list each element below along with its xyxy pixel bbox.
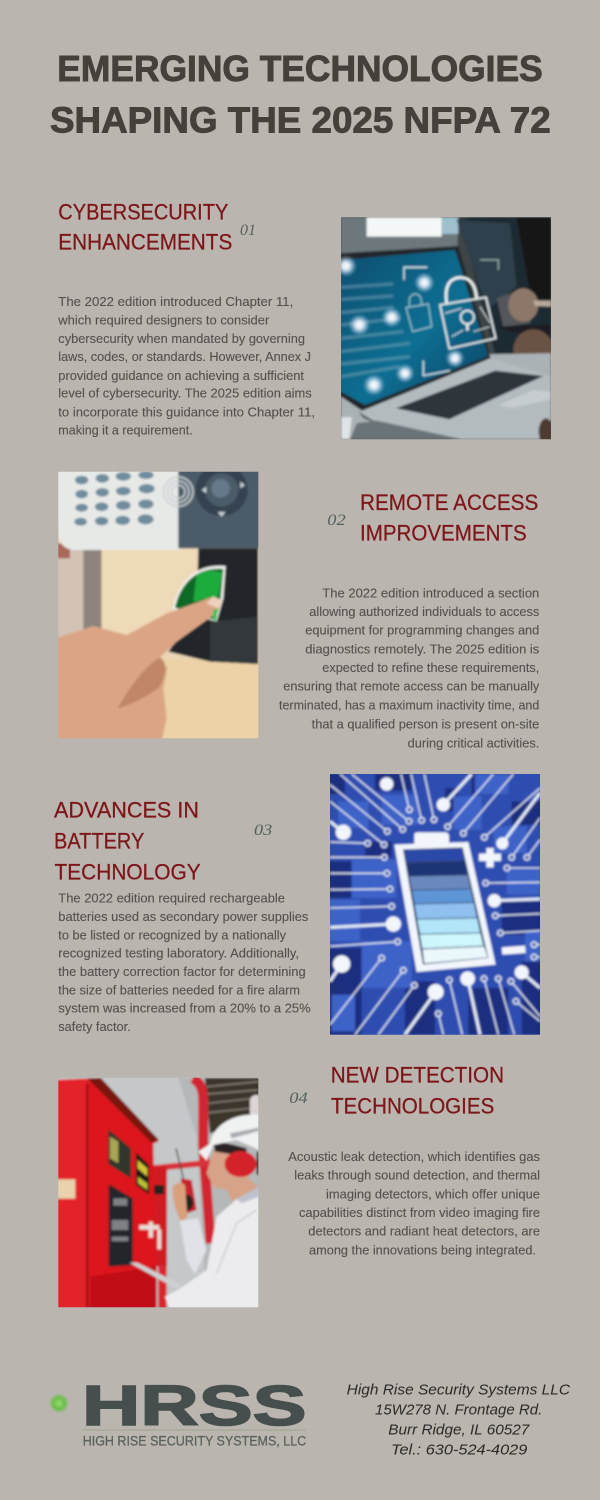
section number 04: 04	[289, 1090, 308, 1107]
text block: battery: to be listed or recognized by a nationally	[58, 928, 287, 942]
text block: cybersecurity: The 2022 edition introduced Chapter 11,	[58, 295, 293, 309]
text block: remote access: allowing authorized individuals to access	[309, 605, 539, 619]
text block: detection: Acoustic leak detection, which identifies gas	[288, 1150, 540, 1164]
text block: remote access: equipment for programming changes and	[305, 624, 539, 638]
section number 02: 02	[327, 512, 346, 529]
text block: cybersecurity: laws, codes, or standards. However, Annex J	[58, 350, 311, 364]
title: SHAPING THE 2025 NFPA 72	[50, 100, 551, 141]
heading: new detection technologies: TECHNOLOGIES	[331, 1094, 494, 1119]
heading: cybersecurity enhancements: ENHANCEMENTS	[58, 229, 232, 254]
text block: detection: capabilities distinct from video imaging fire	[299, 1206, 540, 1220]
text block: detection: leaks through sound detection, and thermal	[294, 1169, 540, 1183]
text block: detection: among the innovations being integrated.	[309, 1243, 536, 1257]
text block: detection: imaging detectors, which offer unique	[326, 1187, 540, 1201]
text block: remote access: The 2022 edition introduced a section	[322, 586, 539, 600]
title	[50, 48, 551, 141]
text block: detection: detectors and radiant heat detectors, are	[308, 1225, 540, 1239]
panel: cybersecurity enhancements	[57, 199, 563, 445]
text block: battery: recognized testing laboratory. Additionally,	[58, 947, 299, 961]
heading: cybersecurity enhancements: CYBERSECURITY	[58, 199, 228, 224]
text block: cybersecurity: cybersecurity when mandated by governing	[58, 332, 305, 346]
text block: battery: the size of batteries needed for a fire alarm	[58, 983, 300, 997]
text block: cybersecurity: making it a requirement.	[58, 423, 193, 437]
icon: green dot	[50, 1395, 68, 1412]
heading: remote access improvements	[360, 490, 538, 546]
text block: battery: the battery correction factor for determining	[58, 965, 306, 979]
section number 01: 01	[240, 222, 256, 239]
text block: battery: system was increased from a 20% to a 25%	[58, 1002, 311, 1016]
text block: remote access: terminated, has a maximum inactivity time, and	[279, 698, 539, 712]
text block: remote access: ensuring that remote access can be manually	[283, 680, 540, 694]
panel: advances in battery technology	[54, 768, 558, 1041]
text block: cybersecurity	[57, 295, 315, 437]
logo tagline: HIGH RISE SECURITY SYSTEMS, LLC	[83, 1433, 306, 1449]
text block: remote access: during critical activities.	[408, 736, 539, 750]
text block: remote access: diagnostics remotely. The 2025 edition is	[305, 642, 539, 656]
heading: cybersecurity enhancements	[58, 199, 232, 254]
contact information: 15W278 N. Frontage Rd.	[375, 1401, 542, 1418]
photo: battery on circuit board	[330, 774, 540, 1035]
heading: advances in battery technology: TECHNOLOGY	[54, 859, 201, 884]
text block: remote access: expected to refine these requirements,	[322, 661, 539, 675]
contact information: Tel.: 630-524-4029	[391, 1441, 528, 1458]
section number 03: 03	[254, 822, 272, 839]
heading: advances in battery technology: ADVANCES IN	[54, 797, 199, 822]
heading: remote access improvements: REMOTE ACCESS	[360, 490, 538, 515]
photo: laptop with padlock	[341, 217, 551, 440]
text block: battery	[58, 892, 311, 1034]
text block: cybersecurity: to incorporate this guidance into Chapter 11,	[58, 406, 315, 420]
heading: advances in battery technology: BATTERY	[54, 828, 144, 853]
heading: advances in battery technology	[54, 797, 201, 884]
text block: detection	[288, 1150, 540, 1257]
heading: new detection technologies: NEW DETECTION	[331, 1062, 504, 1087]
text block: cybersecurity: level of cybersecurity. The 2025 edition aims	[58, 387, 312, 401]
panel: remote access improvements	[50, 464, 540, 750]
heading: new detection technologies	[331, 1062, 504, 1119]
text block: battery: batteries used as secondary power supplies	[58, 910, 308, 924]
heading: remote access improvements: IMPROVEMENTS	[360, 521, 527, 546]
photo: fingerprint reader	[58, 472, 258, 738]
text block: cybersecurity: which required designers to consider	[57, 313, 269, 327]
text block: remote access: that a qualified person is present on-site	[312, 717, 539, 731]
logo wordmark: HRSS	[82, 1374, 306, 1438]
panel: new detection technologies	[50, 1062, 540, 1320]
contact information: High Rise Security Systems LLC	[347, 1381, 570, 1398]
title: EMERGING TECHNOLOGIES	[57, 48, 543, 89]
contact information	[347, 1381, 570, 1458]
contact information: Burr Ridge, IL 60527	[388, 1421, 530, 1438]
text block: battery: The 2022 edition required rechargeable	[58, 892, 285, 906]
logo: HRSS	[50, 1374, 306, 1449]
text block: battery: safety factor.	[58, 1020, 131, 1034]
photo: technician at red fire pump controller	[58, 1078, 258, 1308]
text block: remote access	[279, 586, 540, 750]
text block: cybersecurity: provided guidance on achieving a sufficient	[58, 369, 305, 383]
